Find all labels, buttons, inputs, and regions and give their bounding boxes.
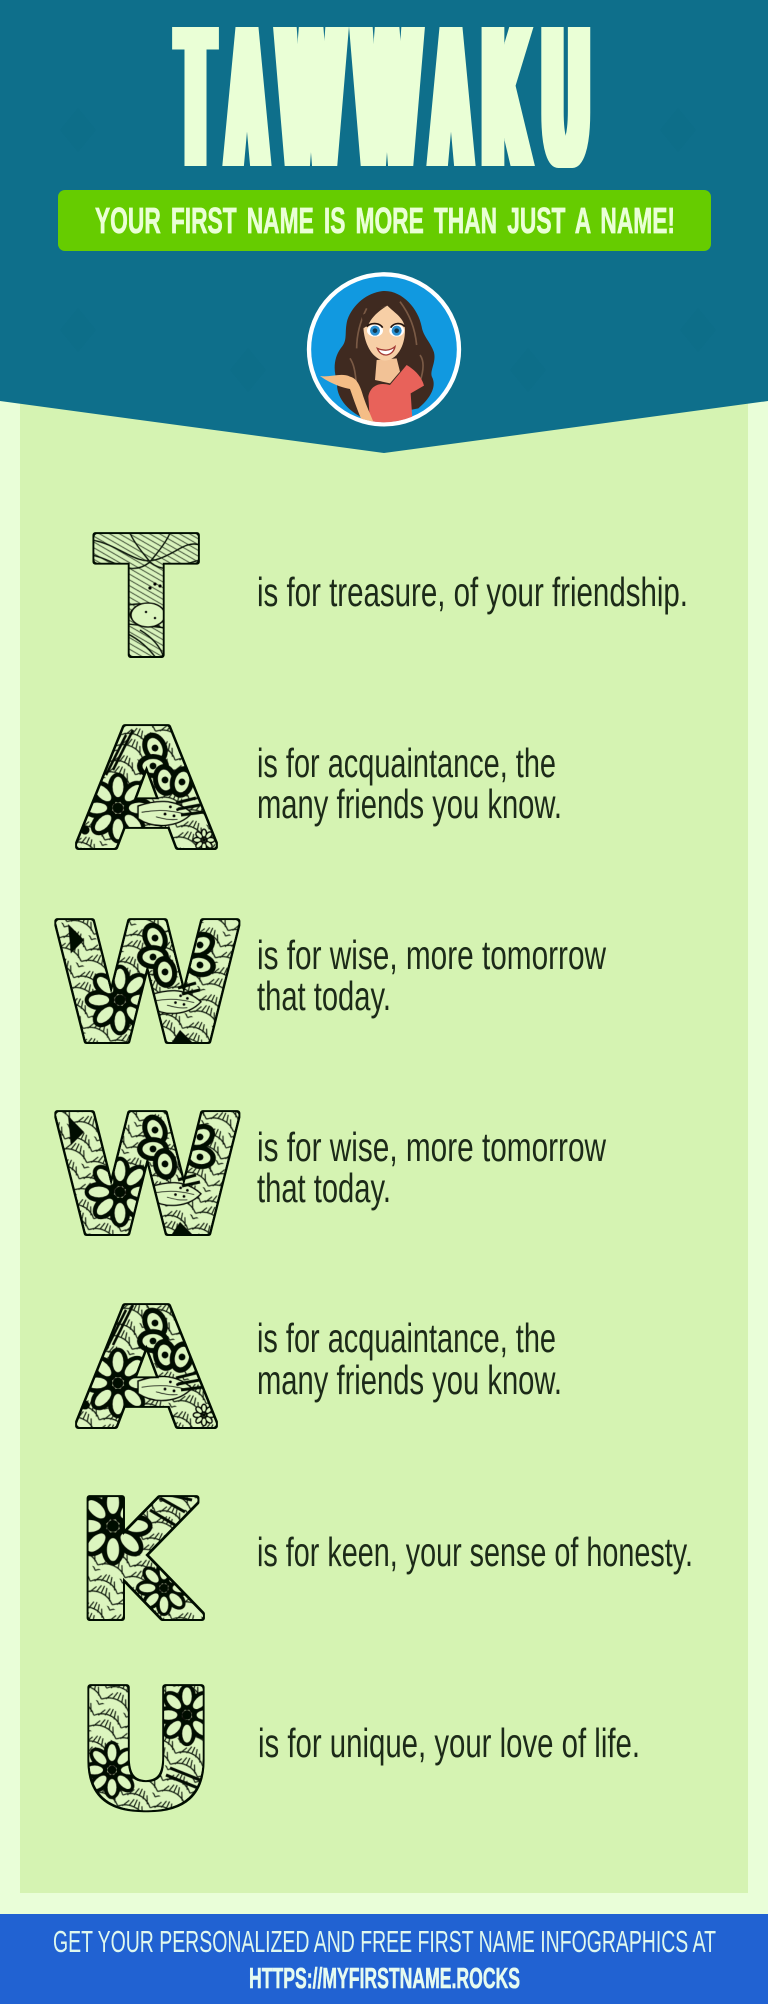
text: W lines: is for wise, more tomorrow [257, 932, 606, 978]
letter T: T [96, 506, 196, 691]
header banner [0, 0, 768, 453]
text: W lines: that today. [257, 1165, 391, 1211]
letter K: K [78, 1469, 201, 1654]
row: W second [54, 1084, 606, 1269]
row: A [80, 698, 562, 883]
text: A lines [257, 740, 562, 827]
letter A: A [80, 1277, 214, 1462]
footer [0, 1914, 768, 2004]
footer url: HTTPS://MYFIRSTNAME.ROCKS [249, 1963, 520, 1995]
row: U [77, 1658, 640, 1843]
text: W lines [257, 932, 606, 1019]
letter U: U [77, 1658, 215, 1843]
row: K [78, 1469, 693, 1654]
letter A: A [80, 698, 214, 883]
text: A lines: is for acquaintance, the [257, 740, 556, 786]
content panel [20, 380, 748, 1893]
text: W lines [257, 1124, 606, 1211]
row: T [96, 506, 688, 691]
row: W [54, 892, 606, 1077]
text: W lines: is for wise, more tomorrow [257, 1124, 606, 1170]
text: A lines: is for acquaintance, the [257, 1315, 556, 1361]
text: A lines [257, 1315, 562, 1403]
icon: avatar of a woman [309, 274, 459, 424]
letter W: W [54, 1084, 240, 1269]
text: A lines: many friends you know. [257, 1357, 562, 1403]
tagline bar [58, 190, 711, 251]
letter W: W [54, 892, 240, 1077]
row: A second [80, 1277, 562, 1462]
text: A lines: many friends you know. [257, 781, 562, 827]
text: W lines: that today. [257, 973, 391, 1019]
